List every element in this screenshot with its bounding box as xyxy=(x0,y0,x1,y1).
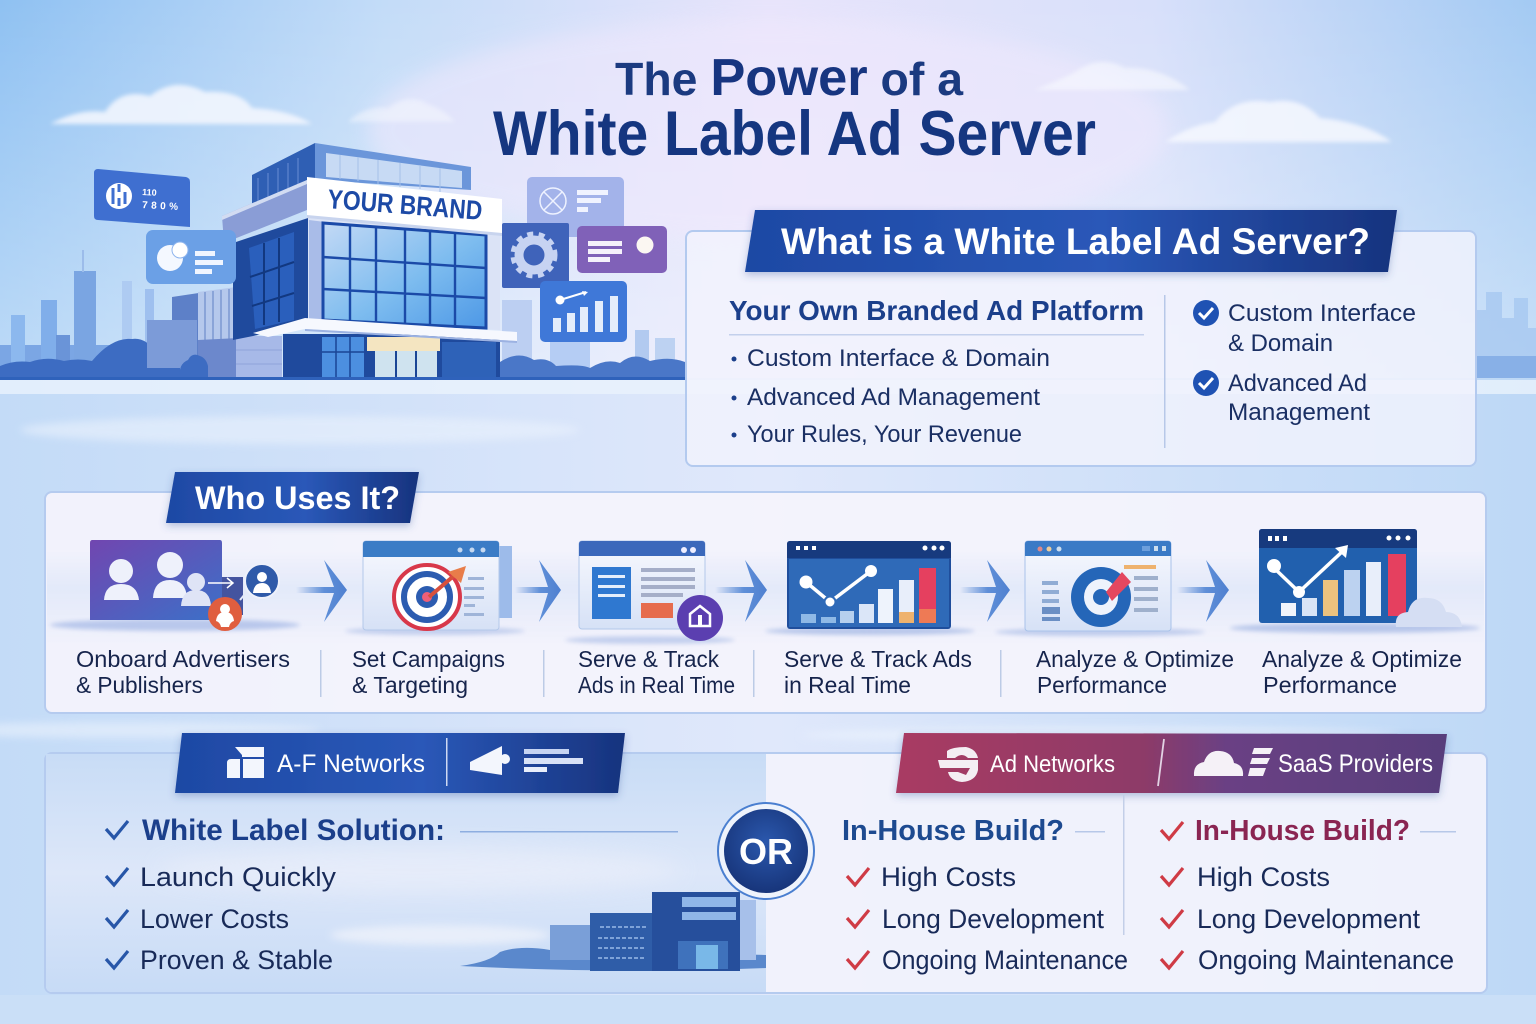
checked features: Management xyxy=(1228,399,1370,426)
title xyxy=(493,49,1096,169)
OR badge xyxy=(718,803,814,899)
in-house list column 2: Ongoing Maintenance xyxy=(1198,945,1454,975)
white label list xyxy=(106,814,678,975)
in-house list column 2: Long Development xyxy=(1197,904,1420,934)
step 5 icon: analyze gauge xyxy=(995,541,1205,636)
heading banner xyxy=(745,210,1397,272)
subheading: Your Own Branded Ad Platform xyxy=(729,295,1144,326)
clouds xyxy=(50,62,1392,142)
heading banner: What is a White Label Ad Server? xyxy=(781,221,1370,262)
step labels: Analyze & Optimize xyxy=(1036,646,1234,672)
side windows xyxy=(249,232,294,329)
card: gear xyxy=(502,223,569,288)
in-house list column 1: Ongoing Maintenance xyxy=(882,945,1128,975)
step labels: & Publishers xyxy=(76,672,203,698)
step labels xyxy=(76,646,1462,698)
title: White Label Ad Server xyxy=(493,99,1096,169)
feature bullets: Your Rules, Your Revenue xyxy=(747,421,1022,448)
card: stats: 110 xyxy=(142,187,157,198)
horizon line xyxy=(0,377,685,380)
title: The Power of a xyxy=(615,49,963,107)
card: stats xyxy=(94,169,190,227)
step 2 icon: target xyxy=(345,541,525,635)
header banner: white label audience: A-F Networks xyxy=(277,750,425,778)
card: chart xyxy=(540,281,627,342)
step labels: Analyze & Optimize xyxy=(1262,646,1462,672)
step labels: Onboard Advertisers xyxy=(76,646,290,672)
in-house list column 1: Long Development xyxy=(882,904,1104,934)
brand sign: YOUR BRAND xyxy=(327,184,483,226)
arrow 1 xyxy=(296,560,347,622)
white label list: Launch Quickly xyxy=(140,862,337,892)
heading banner xyxy=(166,472,419,523)
icon: megaphone xyxy=(470,746,583,775)
step labels: Ads in Real Time xyxy=(578,672,735,698)
arrow 5 xyxy=(1177,560,1229,622)
right skyline xyxy=(1476,292,1536,378)
checked features: Custom Interface xyxy=(1228,300,1416,327)
in-house list column 1: High Costs xyxy=(881,862,1016,892)
in-house list column 2 xyxy=(1161,815,1456,975)
arrow 2 xyxy=(515,560,561,622)
top floor xyxy=(252,143,471,220)
icon: cloud xyxy=(1194,751,1243,776)
step labels: Serve & Track Ads xyxy=(784,646,972,672)
step labels: Performance xyxy=(1037,672,1167,698)
panel: what is a white label ad server xyxy=(686,210,1476,466)
white label list: White Label Solution: xyxy=(142,814,445,847)
feature bullets: Advanced Ad Management xyxy=(747,384,1040,411)
step 4 icon: dashboard xyxy=(765,541,975,635)
background right skyline xyxy=(500,300,685,378)
panel: who uses it xyxy=(45,472,1486,713)
step labels: in Real Time xyxy=(784,672,911,698)
arrow 3 xyxy=(715,560,767,622)
card: stats: 780% xyxy=(142,200,178,213)
card: purple xyxy=(577,226,667,273)
card: envelope xyxy=(527,177,624,237)
icon: ad networks xyxy=(938,747,978,782)
icon: network block xyxy=(227,747,264,778)
in-house list column 1 xyxy=(842,815,1128,975)
white label list: Lower Costs xyxy=(140,904,289,934)
header banner: ad networks and saas xyxy=(896,733,1447,793)
distant building illustration xyxy=(460,892,766,971)
feature bullets: Custom Interface & Domain xyxy=(747,345,1050,372)
card: pie xyxy=(146,230,236,284)
front facade xyxy=(233,218,500,340)
ground floor xyxy=(283,334,500,378)
in-house list column 2: In-House Build? xyxy=(1195,815,1410,847)
OR badge: OR xyxy=(739,831,793,872)
checked features xyxy=(1193,300,1416,426)
step labels: Set Campaigns xyxy=(352,646,505,672)
arrow 4 xyxy=(960,560,1010,622)
checked features: Advanced Ad xyxy=(1228,370,1367,397)
header banner: ad networks and saas: Ad Networks xyxy=(990,751,1115,778)
side annex xyxy=(147,285,282,378)
heading banner: Who Uses It? xyxy=(195,480,400,516)
step 1 icon: users xyxy=(50,540,300,631)
header banner: white label audience xyxy=(175,733,625,793)
step 6 icon: growth dashboard xyxy=(1230,529,1480,633)
ledge xyxy=(253,318,517,343)
step 3 icon: ad page xyxy=(565,541,735,644)
step labels: Performance xyxy=(1263,672,1397,698)
panel: comparison xyxy=(45,733,1487,993)
in-house list column 1: In-House Build? xyxy=(842,815,1064,847)
roof overhang xyxy=(222,180,307,243)
header banner: ad networks and saas: SaaS Providers xyxy=(1278,750,1433,778)
step labels: Serve & Track xyxy=(578,646,719,672)
white label list: Proven & Stable xyxy=(140,945,333,975)
left skyline xyxy=(0,250,230,378)
feature bullets xyxy=(732,345,1050,448)
hero illustration: city and office building xyxy=(0,143,685,378)
in-house list column 2: High Costs xyxy=(1197,862,1330,892)
brand sign xyxy=(307,177,502,236)
step labels: & Targeting xyxy=(352,672,468,698)
checked features: & Domain xyxy=(1228,330,1333,357)
front glass wall xyxy=(323,223,486,329)
left half background xyxy=(46,754,766,992)
